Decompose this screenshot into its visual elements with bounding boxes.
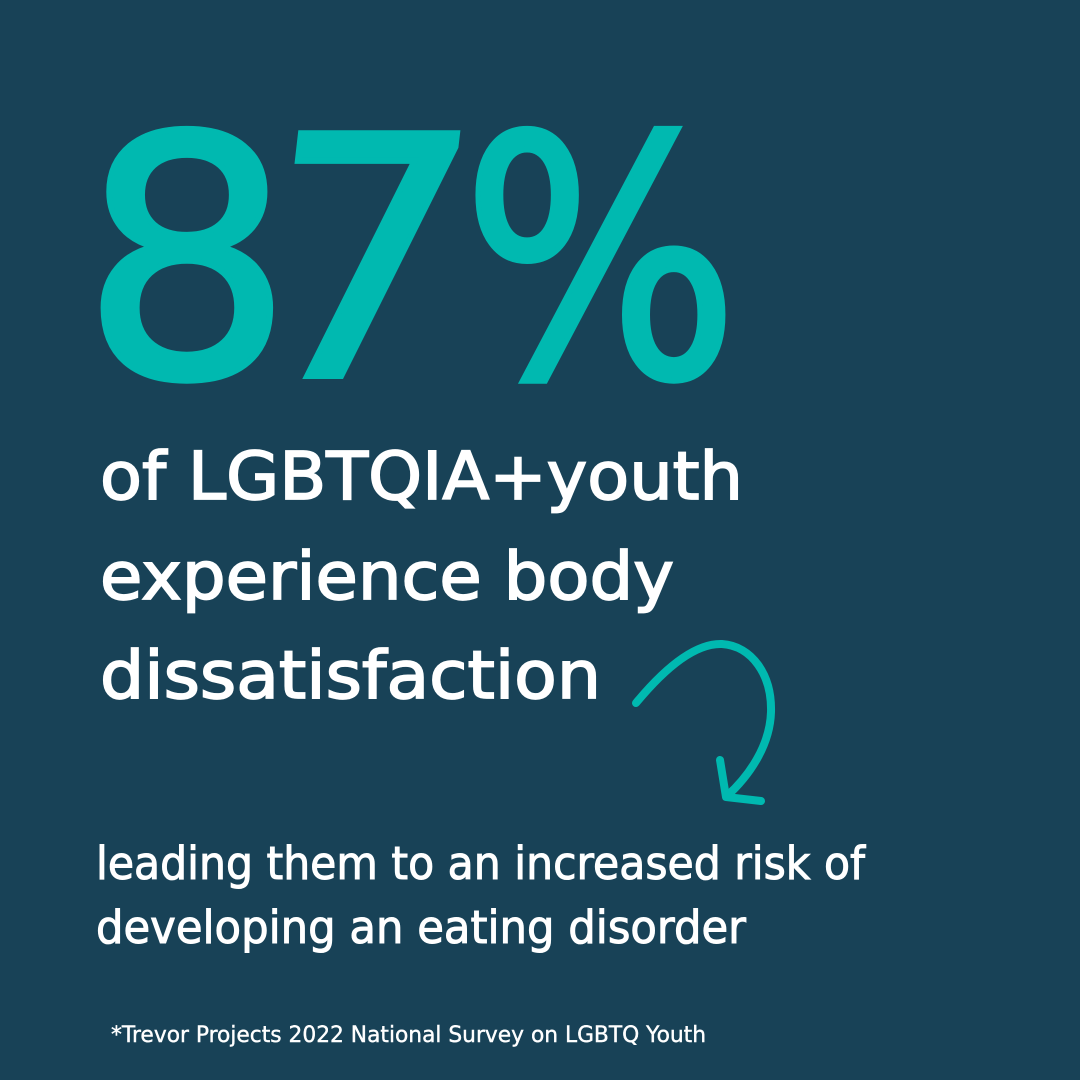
secondary text: leading them to an increased risk of <box>96 837 866 890</box>
main statement heading: dissatisfaction <box>100 637 601 714</box>
secondary text: developing an eating disorder <box>96 901 746 954</box>
main statement heading: of LGBTQIA+youth <box>100 438 743 515</box>
main statement heading: experience body <box>100 538 674 615</box>
main statement heading <box>100 438 743 714</box>
big stat 87% <box>81 67 739 455</box>
secondary text <box>96 837 866 954</box>
source footnote: *Trevor Projects 2022 National Survey on LGBTQ Youth <box>111 1023 706 1048</box>
big stat 87%: % <box>462 67 739 455</box>
big stat 87%: 7 <box>237 67 493 455</box>
icon: curved arrow <box>636 644 771 801</box>
big stat 87%: 8 <box>81 67 293 455</box>
